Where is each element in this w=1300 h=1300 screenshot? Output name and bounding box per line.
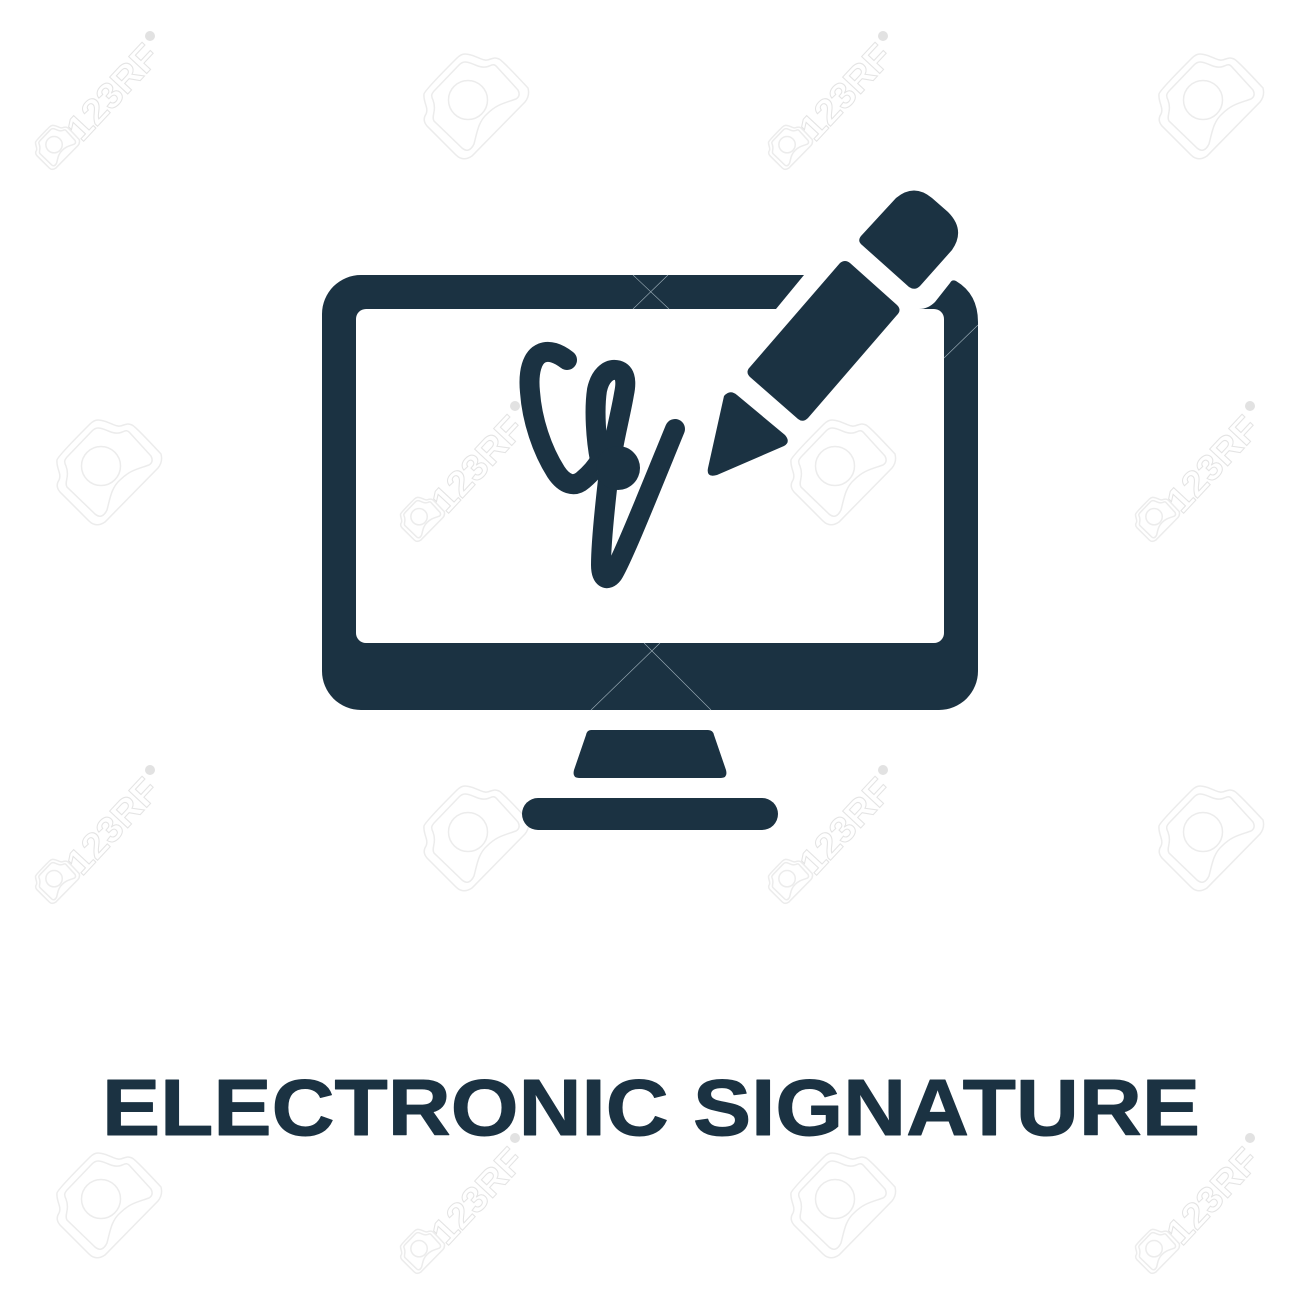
watermark: hairlines across monitor [591,275,978,710]
monitor stand [574,730,726,778]
watermark: 123RF logos: 123RF [791,770,900,882]
title: ELECTRONIC SIGNATURE [102,1063,1200,1152]
watermark: 123RF logos: 123RF [58,36,167,148]
watermark: 123RF logos: 123RF [423,408,532,520]
pencil tip [708,392,788,476]
icon: electronic signature monitor [322,190,978,830]
watermark: 123RF logos: 123RF [1158,1140,1267,1252]
pencil eraser [859,190,958,289]
pencil body [748,261,900,421]
watermark: 123RF logos: 123RF [1158,408,1267,520]
handwritten signature [530,352,675,578]
watermark: 123RF logos: 123RF [791,36,900,148]
monitor frame [322,275,978,710]
monitor base [522,798,778,830]
watermark: 123RF logos: 123RF [58,770,167,882]
watermark: 123RF logos: 123RF [423,1140,532,1252]
